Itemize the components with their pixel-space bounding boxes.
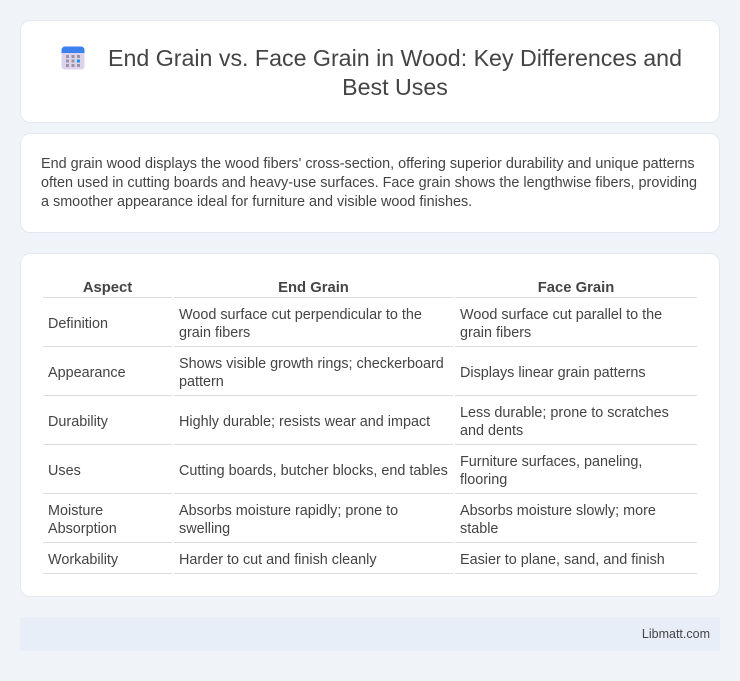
footer bar <box>20 617 720 651</box>
cell <box>179 307 422 341</box>
cell: Less durable; prone to scratches <box>460 405 669 421</box>
cell: Shows visible growth rings; checkerboard <box>179 356 444 372</box>
title: End Grain vs. Face Grain in Wood: Key Differences and <box>108 45 682 71</box>
cell <box>179 356 444 390</box>
cell <box>179 503 398 537</box>
cell: pattern <box>179 374 224 390</box>
intro text: often used in cutting boards and heavy-use surfaces. Face grain shows the lengthwise fibers, providing <box>41 175 697 191</box>
header: End Grain: End Grain <box>278 280 349 296</box>
title <box>108 45 682 100</box>
row: Moisture Absorption: Moisture <box>48 503 103 519</box>
cell: Easier to plane, sand, and finish <box>460 552 665 568</box>
row: Durability: Durability <box>48 414 108 430</box>
cell: and dents <box>460 423 523 439</box>
cell <box>460 307 662 341</box>
row: Uses: Uses <box>48 463 81 479</box>
title: Best Uses <box>342 74 448 100</box>
intro text <box>41 156 697 210</box>
cell: swelling <box>179 521 230 537</box>
cell <box>460 503 656 537</box>
cell: Harder to cut and finish cleanly <box>179 552 377 568</box>
cell: grain fibers <box>460 325 531 341</box>
icon: calendar <box>62 46 84 70</box>
cell: Absorbs moisture slowly; more <box>460 503 656 519</box>
cell: Absorbs moisture rapidly; prone to <box>179 503 398 519</box>
table card <box>20 253 720 597</box>
row: Moisture Absorption <box>48 503 117 537</box>
cell: Displays linear grain patterns <box>460 365 646 381</box>
header: Aspect: Aspect <box>83 280 132 296</box>
cell: Wood surface cut parallel to the <box>460 307 662 323</box>
footer text: Libmatt.com <box>642 627 710 641</box>
cell <box>460 405 669 439</box>
cell <box>460 454 642 488</box>
row: Workability: Workability <box>48 552 118 568</box>
cell: stable <box>460 521 498 537</box>
row: Appearance: Appearance <box>48 365 126 381</box>
cell: Furniture surfaces, paneling, <box>460 454 642 470</box>
cell: Wood surface cut perpendicular to the <box>179 307 422 323</box>
header: Face Grain: Face Grain <box>538 280 614 296</box>
cell: flooring <box>460 472 507 488</box>
intro text: a smoother appearance ideal for furniture and visible wood finishes. <box>41 194 472 210</box>
cell: Highly durable; resists wear and impact <box>179 414 430 430</box>
row: Moisture Absorption: Absorption <box>48 521 117 537</box>
title card <box>20 20 720 123</box>
row: Definition: Definition <box>48 316 108 332</box>
cell: Cutting boards, butcher blocks, end tables <box>179 463 448 479</box>
intro text: End grain wood displays the wood fibers' cross-section, offering superior durability and unique patterns <box>41 156 695 172</box>
intro card <box>20 133 720 233</box>
cell: grain fibers <box>179 325 250 341</box>
